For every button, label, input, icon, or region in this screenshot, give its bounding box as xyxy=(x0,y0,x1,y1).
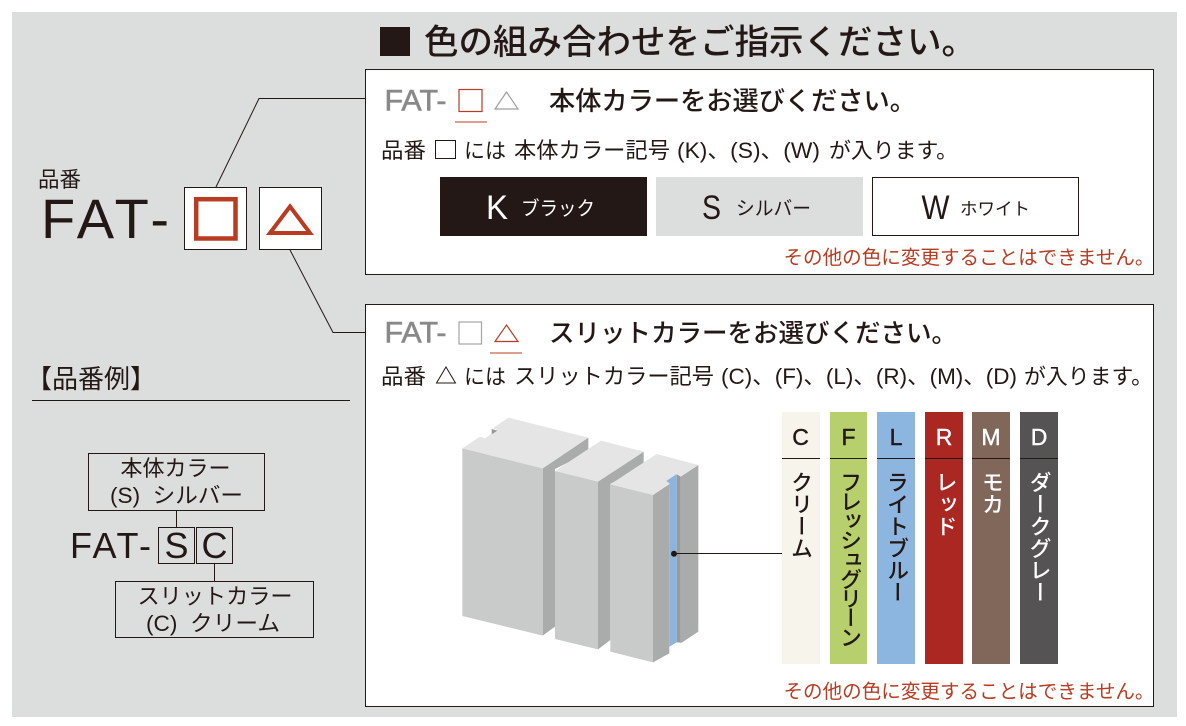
code box S xyxy=(158,525,194,566)
swatch: silver: S xyxy=(702,189,721,227)
colour bar: R red: レッド xyxy=(932,471,958,537)
product number diagram: 品番 xyxy=(38,168,81,192)
swatch: silver: シルバー xyxy=(736,198,811,220)
body colour explanation: 品番 xyxy=(381,139,426,163)
colour bar: L light blue xyxy=(877,412,915,664)
colour bar: F fresh green: フレッシュグリーン xyxy=(837,471,862,647)
swatch: black: ブラック xyxy=(521,197,595,220)
colour bar: D dark grey: D xyxy=(1031,424,1047,450)
colour bar: F fresh green: F xyxy=(841,424,856,450)
warning note: その他の色に変更することはできません。 xyxy=(784,681,1154,703)
illustration: wall panels with slit xyxy=(462,418,698,662)
panel: body colour: 本体カラーをお選びください。 xyxy=(549,86,916,116)
label: body colour silver xyxy=(88,454,264,510)
slit colour explanation: (C)、(F)、(L)、(R)、(M)、(D) xyxy=(721,364,1017,389)
slit colour explanation: には xyxy=(464,366,506,389)
colour bar: R red xyxy=(925,412,963,664)
leader line: slit colour xyxy=(290,250,365,332)
slit colour explanation: が入ります。 xyxy=(1024,365,1153,389)
swatch: white: W xyxy=(922,189,950,227)
panel: slit colour: FAT- xyxy=(384,316,446,350)
colour bar: M mocha: M xyxy=(981,424,1001,450)
product number diagram: FAT- xyxy=(41,187,169,250)
body colour explanation: には xyxy=(464,140,506,163)
panel: slit colour xyxy=(366,304,1154,706)
leader line: body colour xyxy=(216,98,365,187)
body colour explanation: が入ります。 xyxy=(829,139,958,163)
swatch: silver xyxy=(656,177,863,236)
colour bar: C cream xyxy=(782,412,820,664)
slit colour explanation xyxy=(381,364,1153,389)
swatch: white xyxy=(872,178,1078,236)
colour bar: M mocha xyxy=(972,412,1010,664)
swatch: black: K xyxy=(486,189,508,227)
slit colour explanation: 品番 xyxy=(381,365,426,389)
body colour explanation: 本体カラー記号 xyxy=(514,138,670,163)
colour bar: C cream: クリーム xyxy=(788,471,813,559)
panel: body colour xyxy=(366,70,1154,274)
swatch: black xyxy=(440,177,647,236)
body colour explanation xyxy=(381,138,958,163)
warning note: その他の色に変更することはできません。 xyxy=(784,247,1154,269)
product number diagram xyxy=(38,168,322,250)
colour bar: D dark grey: ダークグレー xyxy=(1026,471,1052,603)
product number example diagram xyxy=(70,454,314,638)
code box S: S xyxy=(164,525,189,566)
slit colour explanation: スリットカラー記号 xyxy=(514,364,714,389)
heading: product number example: 【品番例】 xyxy=(26,364,156,394)
colour bar: C cream: C xyxy=(792,424,809,450)
colour bar: D dark grey xyxy=(1020,412,1058,664)
code box C: C xyxy=(202,525,228,566)
colour bar: R red: R xyxy=(936,424,952,450)
colour bar: L light blue: L xyxy=(890,424,903,450)
swatch: white: ホワイト xyxy=(960,199,1030,219)
label: slit colour cream: (C) クリーム xyxy=(146,611,280,636)
label: slit colour cream: スリットカラー xyxy=(138,584,292,609)
colour bar: F fresh green xyxy=(830,412,867,664)
callout line to colour bars xyxy=(671,551,782,557)
body colour explanation: (K)、(S)、(W) xyxy=(677,138,820,163)
panel: body colour: FAT- xyxy=(384,84,446,118)
colour bar: L light blue: ライトブルー xyxy=(884,471,909,603)
colour bar: M mocha: モカ xyxy=(979,471,1004,515)
label: body colour silver: (S) シルバー xyxy=(110,483,243,508)
title: 色の組み合わせをご指示ください。 xyxy=(424,24,976,62)
product number example diagram: FAT- xyxy=(70,525,151,566)
label: slit colour cream xyxy=(116,582,314,638)
label: body colour silver: 本体カラー xyxy=(120,456,230,481)
panel: slit colour: スリットカラーをお選びください。 xyxy=(549,320,957,348)
